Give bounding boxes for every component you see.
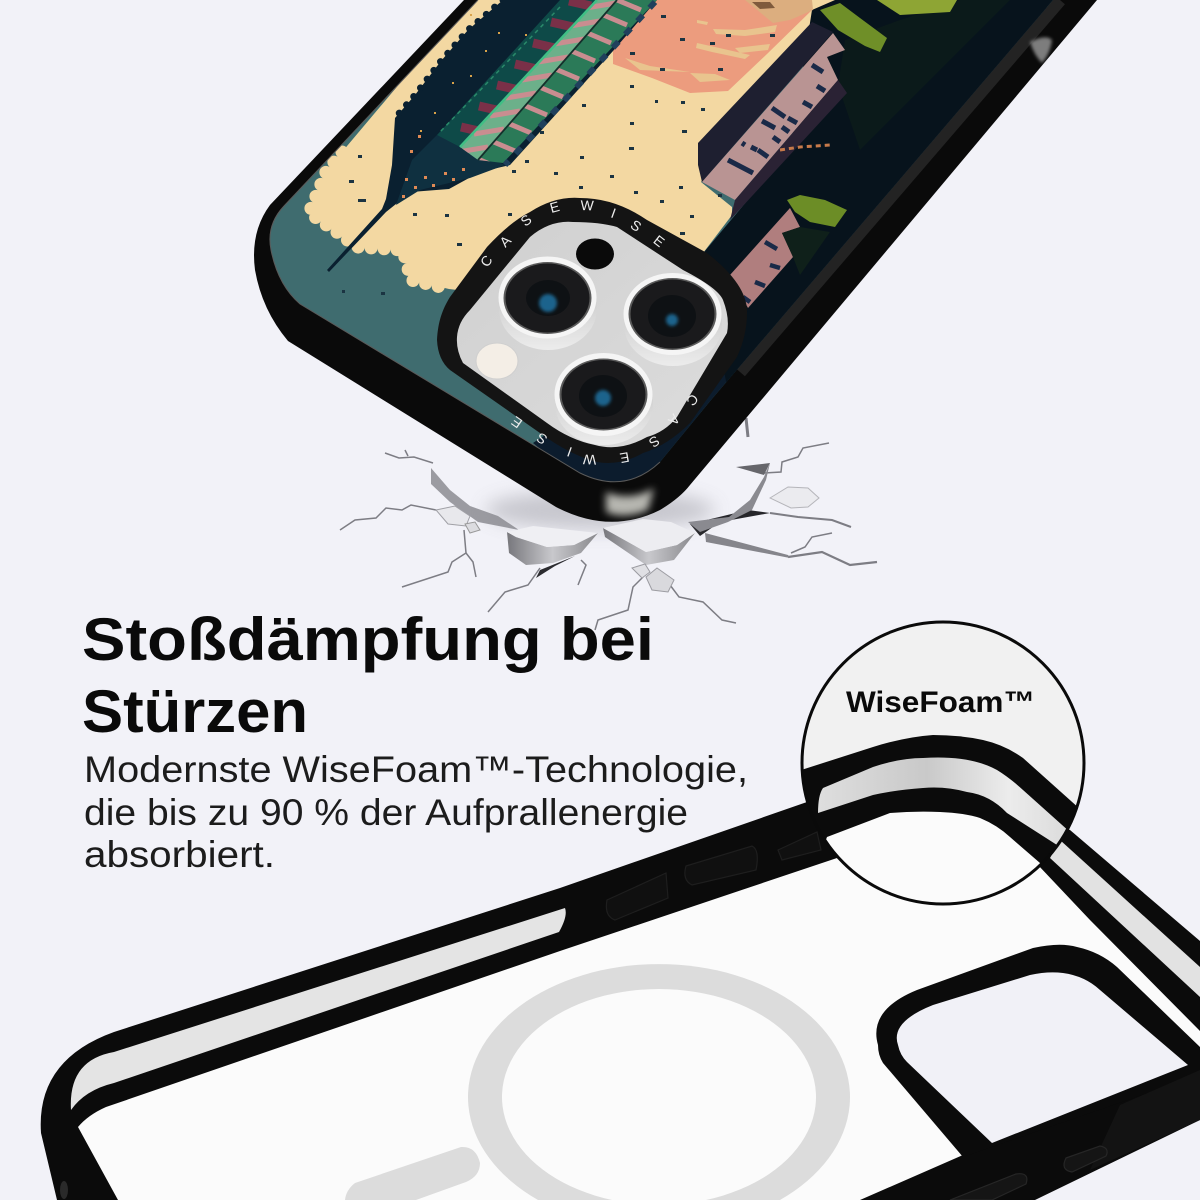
lens 3 xyxy=(554,353,653,445)
shard right xyxy=(603,528,695,565)
lower dark tree xyxy=(782,227,830,275)
magnifier backdrop xyxy=(800,620,1088,908)
scalloped cloud edge xyxy=(309,152,449,289)
brand text bottom: CASEWISE xyxy=(508,391,702,468)
camera module xyxy=(437,197,747,468)
magsafe ring xyxy=(468,964,850,1200)
body text: absorbiert. xyxy=(84,834,275,875)
camera plate xyxy=(457,222,728,447)
ground shadow xyxy=(485,490,715,530)
shard left xyxy=(507,532,598,565)
flash xyxy=(476,343,518,379)
left slab edge xyxy=(431,468,519,530)
second building xyxy=(730,208,800,308)
phone with printed case xyxy=(250,0,1100,522)
magnifier callout xyxy=(795,620,1090,908)
magnifier contents xyxy=(804,735,1076,865)
camera cutout opening xyxy=(897,972,1188,1143)
navy lower strip xyxy=(533,0,1060,500)
magsafe ring centre xyxy=(502,989,816,1200)
building roof xyxy=(698,22,833,182)
tower middle band xyxy=(460,0,616,160)
peach sky xyxy=(613,0,812,93)
lower bush xyxy=(787,195,847,227)
lens 2 xyxy=(624,273,722,366)
small rock left xyxy=(436,506,470,526)
magsafe tab xyxy=(345,1147,480,1200)
foliage top right xyxy=(877,0,957,15)
stars on tower xyxy=(420,14,527,132)
second building windows xyxy=(743,242,780,302)
tower base dark teal xyxy=(396,135,505,205)
sky dots xyxy=(342,15,775,295)
body text: Modernste WiseFoam™-Technologie, xyxy=(84,749,748,790)
lidar xyxy=(576,238,614,270)
tower right band xyxy=(479,0,657,163)
crack lines xyxy=(340,418,877,630)
tower silhouette xyxy=(327,0,657,272)
tower accent lines xyxy=(460,0,597,147)
impact cracks in the ground xyxy=(340,418,877,630)
camera bumper xyxy=(437,198,747,463)
foliage dark xyxy=(838,0,1010,150)
magnified black frame xyxy=(804,735,1076,863)
charging port hint xyxy=(60,1181,68,1199)
lower band sheen xyxy=(1090,1070,1200,1170)
small rock right xyxy=(770,487,819,508)
headline: Stoßdämpfung bei xyxy=(82,606,654,673)
headline: Stürzen xyxy=(82,678,308,745)
magnifier ring xyxy=(802,622,1084,904)
foliage top left xyxy=(820,3,887,52)
tower scalloped edge xyxy=(395,0,503,118)
case highlight xyxy=(606,488,654,516)
right dark landscape xyxy=(700,0,1060,400)
volume buttons xyxy=(606,832,821,920)
peach streaks xyxy=(625,20,777,82)
side button gloss xyxy=(1030,37,1052,63)
right slab edge xyxy=(688,463,770,532)
foam strip right xyxy=(1050,840,1200,997)
screen edge highlight xyxy=(270,0,660,482)
magnifier label: WiseFoam™ xyxy=(846,686,1035,719)
camera cutout ring xyxy=(876,945,1200,1157)
body text xyxy=(84,749,748,875)
headline xyxy=(82,606,654,745)
body text: die bis zu 90 % der Aufprallenergie xyxy=(84,792,688,833)
building facade xyxy=(702,33,845,200)
tower edge nubs xyxy=(505,2,655,165)
cream sky xyxy=(309,0,840,300)
tower left band xyxy=(437,0,595,147)
brand text top: CASEWISE xyxy=(477,197,668,270)
building underside xyxy=(730,80,847,220)
magnified foam strip xyxy=(818,758,1066,844)
case outer frame xyxy=(41,770,1200,1200)
tan house xyxy=(745,0,813,23)
building windows xyxy=(728,65,825,173)
magnified back panel xyxy=(826,812,1040,902)
lower side buttons xyxy=(950,1146,1107,1200)
small rocks bottom xyxy=(646,568,674,592)
case shell xyxy=(254,0,1097,522)
tower base lights xyxy=(402,135,465,198)
clear case photo xyxy=(41,770,1200,1200)
screen artwork xyxy=(270,0,1053,482)
clear back panel xyxy=(78,858,1200,1200)
foam strip left xyxy=(71,908,566,1110)
lens 1 xyxy=(498,256,597,350)
case side lip xyxy=(740,0,1060,372)
orange vine xyxy=(780,145,830,150)
crack wedges xyxy=(705,533,790,558)
